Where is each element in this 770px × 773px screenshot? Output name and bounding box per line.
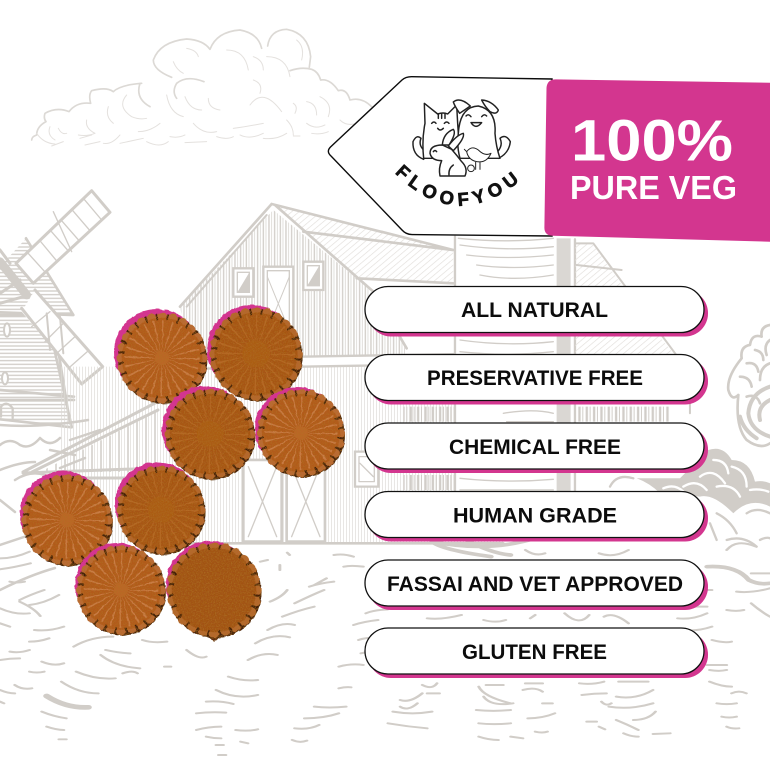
pill: gluten free bbox=[365, 628, 708, 678]
hill marks near windmill bbox=[0, 420, 100, 590]
pill: human grade: HUMAN GRADE bbox=[453, 504, 617, 528]
pink panel bbox=[544, 79, 770, 242]
cookie 7 bbox=[75, 543, 166, 635]
cookie 4 bbox=[255, 387, 345, 478]
pill: human grade bbox=[365, 492, 708, 542]
white arrow tag bbox=[328, 77, 552, 236]
logo: floofyou animals bbox=[413, 100, 510, 176]
windmill sketch bbox=[0, 191, 110, 427]
tree sketch bbox=[728, 325, 770, 446]
pill: gluten free: GLUTEN FREE bbox=[462, 641, 607, 664]
logo: floofyou wordmark: FLOOFYOU bbox=[395, 164, 518, 206]
feature pills bbox=[365, 286, 708, 678]
barn beams bbox=[140, 353, 503, 370]
barn sketch bbox=[60, 204, 690, 543]
pill: preservative free: PRESERVATIVE FREE bbox=[427, 367, 643, 390]
cookie 1 bbox=[114, 309, 207, 404]
cookie 6 bbox=[115, 462, 206, 555]
lower barn extension bbox=[23, 402, 160, 545]
barn doors bbox=[243, 460, 325, 542]
right barn roof bbox=[575, 243, 690, 373]
lower barn wall strips bbox=[403, 407, 670, 490]
silo bbox=[455, 237, 575, 537]
barn upper roof bbox=[275, 204, 453, 283]
cookie 3 bbox=[162, 386, 255, 480]
cookie 8 bbox=[166, 541, 262, 641]
bush sketch bbox=[610, 449, 770, 547]
cookie 2 bbox=[207, 305, 303, 401]
barn gable wall bbox=[180, 210, 405, 357]
subheading pure veg: PURE VEG bbox=[570, 169, 737, 206]
cookie group bbox=[20, 305, 345, 641]
pill: chemical free: CHEMICAL FREE bbox=[449, 436, 621, 459]
brand badge bbox=[328, 76, 770, 242]
pill: fassai and vet approved: FASSAI AND VET APPROVED bbox=[387, 573, 683, 596]
cookie 5 bbox=[20, 471, 113, 566]
pill: chemical free bbox=[365, 423, 708, 473]
pill: fassai and vet approved bbox=[365, 560, 708, 610]
pill: all natural: ALL NATURAL bbox=[461, 299, 608, 322]
ground furrow marks bbox=[0, 537, 770, 755]
cloud sketch bbox=[32, 29, 372, 146]
windmill body bbox=[0, 315, 72, 427]
windmill sails bbox=[16, 191, 110, 283]
headline 100%: 100% bbox=[571, 109, 733, 174]
pill: preservative free bbox=[365, 354, 708, 404]
pill: all natural bbox=[365, 286, 708, 336]
barn windows bbox=[233, 262, 323, 330]
